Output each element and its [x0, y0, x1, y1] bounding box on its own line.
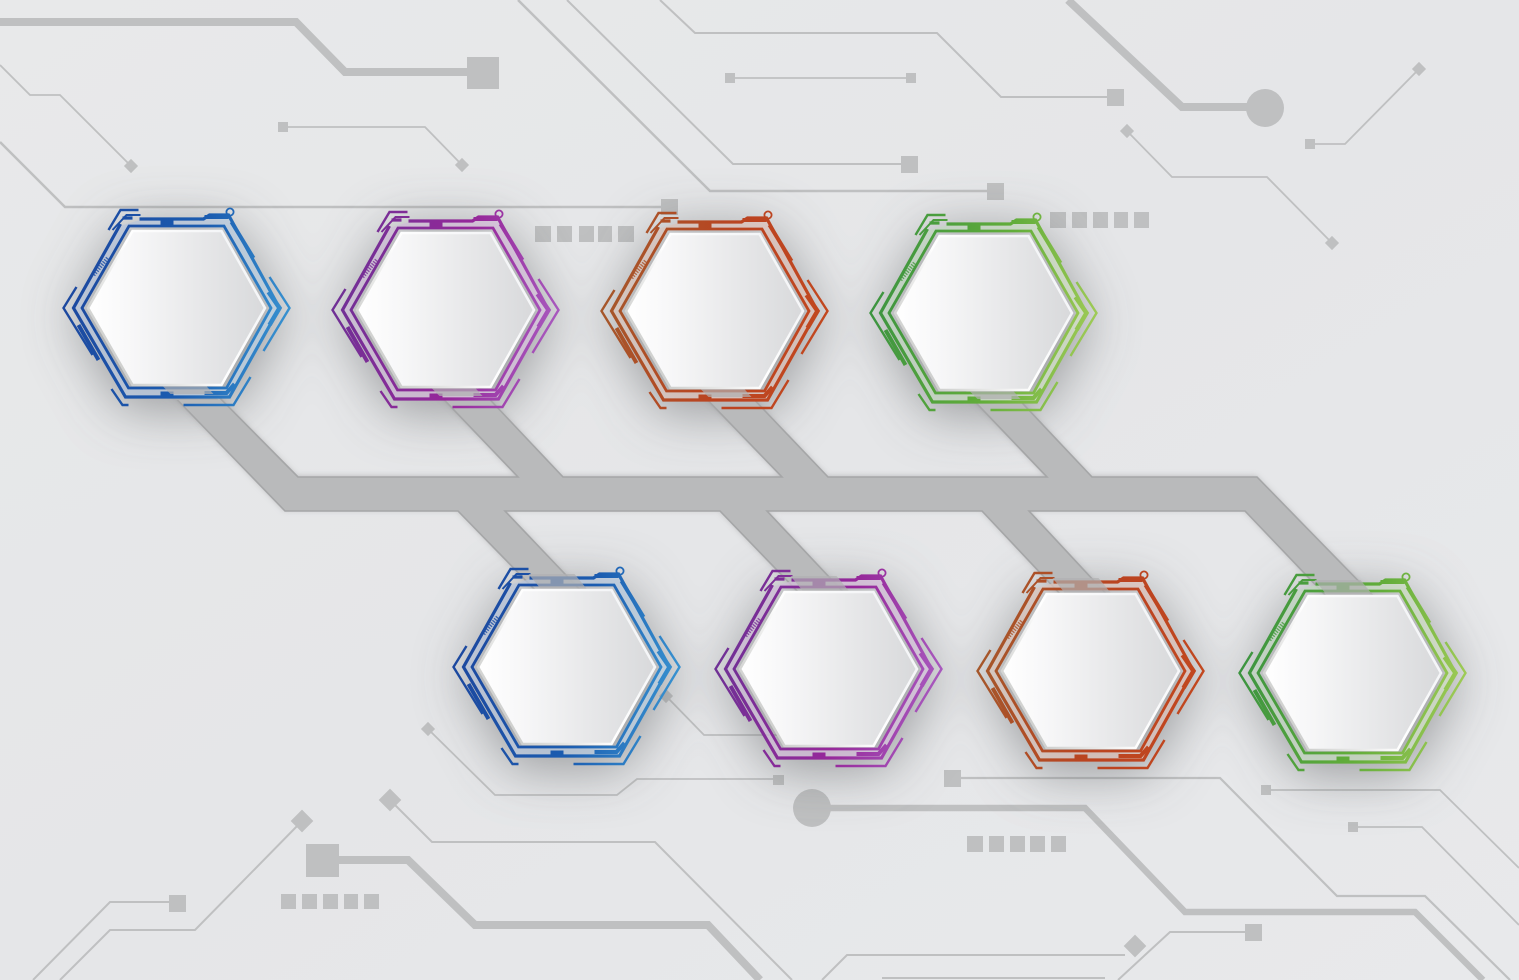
square dots: row three	[967, 836, 1066, 852]
circuit ring	[64, 208, 290, 405]
hexagon 3: orange	[602, 211, 828, 408]
white face	[740, 592, 917, 746]
hexagon 7: orange	[978, 571, 1204, 768]
hexagon 4: green	[870, 213, 1096, 410]
trace: thick with circle	[1068, 0, 1284, 127]
hexagon 5: blue	[454, 567, 680, 764]
trace: upper-left diamond	[0, 65, 138, 173]
trace: bottom-left square	[33, 895, 186, 980]
ribbon overlap	[430, 386, 482, 396]
white face	[88, 231, 265, 385]
trace: under hexagon five	[659, 689, 790, 735]
hexagon 2: purple	[332, 210, 558, 407]
ribbon overlap	[160, 384, 214, 394]
white face	[895, 236, 1072, 390]
trace: right edge upper	[1261, 785, 1519, 868]
circuit ring	[978, 571, 1204, 768]
square dots: row two	[1050, 212, 1149, 228]
trace: thick top-left	[0, 22, 499, 89]
circuit traces: bottom	[33, 689, 1519, 980]
trace: bottom-left diamond	[60, 810, 313, 980]
trace: top centre	[660, 0, 1124, 106]
ribbon overlap	[790, 576, 850, 593]
white face	[1002, 594, 1179, 748]
white face	[1264, 596, 1441, 750]
trace: thick bottom-left	[306, 844, 760, 980]
white face	[626, 234, 803, 388]
trace: thick with circle, bottom right	[793, 789, 1483, 980]
trace: lower right long	[944, 770, 1510, 980]
circuit ring	[716, 569, 942, 766]
hexagon 6: purple	[716, 569, 942, 766]
ribbon overlap	[1052, 578, 1112, 595]
circuit ring	[1240, 573, 1466, 770]
trace: bottom short	[882, 977, 1105, 979]
trace: lower centre diamond	[421, 722, 784, 795]
ribbon overlap	[698, 387, 752, 397]
trace: right diamonds	[1120, 124, 1339, 250]
connector ribbon	[162, 384, 1375, 598]
trace: right edge lower	[1348, 822, 1519, 925]
ribbon overlap	[1314, 580, 1374, 597]
white face	[357, 233, 534, 387]
trace: short double-ended	[725, 73, 916, 83]
circuit ring	[870, 213, 1096, 410]
square dots: row four	[281, 894, 379, 909]
trace: far right	[1305, 62, 1426, 149]
hexagon drop shadows	[73, 226, 1459, 775]
circuit ring	[332, 210, 558, 407]
circuit ring	[602, 211, 828, 408]
hexagon 1: blue	[64, 208, 290, 405]
circuit traces: top	[0, 0, 1426, 250]
trace: short with square and diamond	[278, 122, 469, 172]
hexagon 8: green	[1240, 573, 1466, 770]
trace: diagonal to 995,191	[518, 0, 1004, 200]
trace: bottom diamond line	[379, 789, 792, 980]
ribbon base under ring	[160, 385, 218, 400]
trace: long line behind first row	[0, 142, 678, 215]
square dots: row one	[535, 226, 634, 242]
trace: bottom square	[1118, 924, 1262, 980]
trace: bottom centre diamond	[822, 935, 1146, 980]
ribbon overlap	[528, 574, 588, 591]
trace: diagonal to 909,164	[567, 0, 918, 173]
circuit ring	[454, 567, 680, 764]
ribbon overlap	[968, 389, 1020, 399]
white face	[478, 590, 655, 744]
